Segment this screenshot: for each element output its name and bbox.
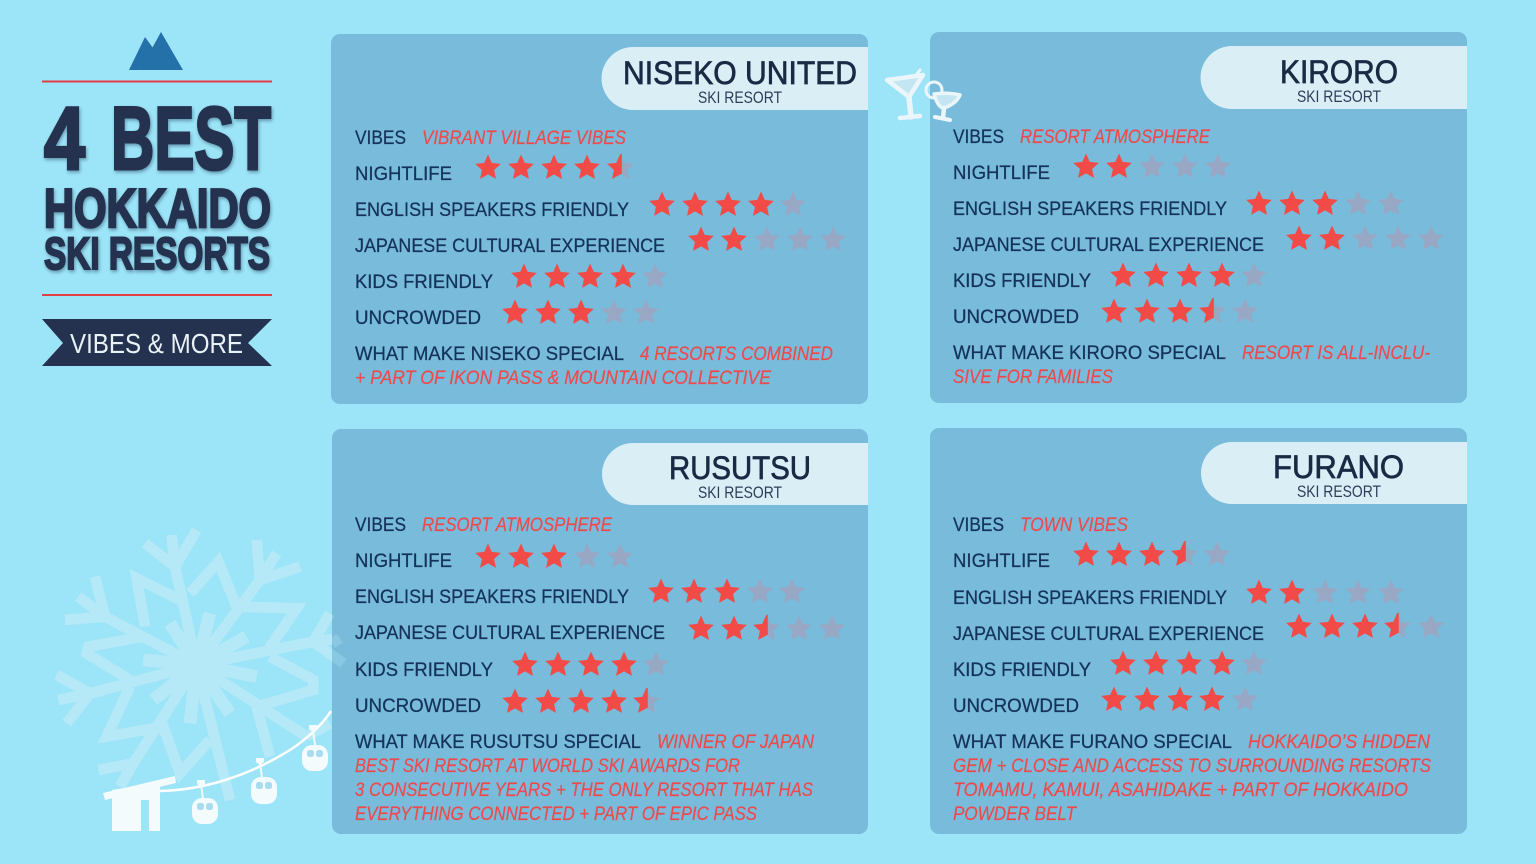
title block: HOKKAIDO: [44, 177, 271, 239]
header: Rusutsu: [602, 443, 868, 505]
rating labels and stars: JAPANESE CULTURAL EXPERIENCE: [355, 622, 665, 644]
header: Rusutsu: SKI RESORT: [698, 483, 782, 502]
what makes Furano special: WHAT MAKE FURANO SPECIAL: [953, 731, 1232, 753]
header: Kiroro: KIRORO: [1280, 54, 1398, 90]
what makes Furano special: HOKKAIDO’S HIDDEN: [1248, 731, 1431, 753]
what makes Rusutsu special: BEST SKI RESORT AT WORLD SKI AWARDS FOR: [355, 755, 740, 777]
rating labels and stars: JAPANESE CULTURAL EXPERIENCE: [355, 235, 665, 257]
rating labels and stars: [953, 514, 1444, 717]
rating labels and stars: UNCROWDED: [355, 695, 481, 717]
rating labels and stars: VIBES: [953, 514, 1004, 536]
what makes Rusutsu special: WHAT MAKE RUSUTSU SPECIAL: [355, 731, 641, 753]
icon: gondola 3: [302, 725, 328, 771]
rating labels and stars: UNCROWDED: [953, 695, 1079, 717]
what makes Rusutsu special: WINNER OF JAPAN: [657, 731, 815, 753]
header: Kiroro: [1201, 46, 1467, 109]
rating labels and stars: ENGLISH SPEAKERS FRIENDLY: [355, 199, 629, 221]
icon: gondola 1: [192, 780, 218, 824]
rating labels and stars: ENGLISH SPEAKERS FRIENDLY: [953, 587, 1227, 609]
header: Niseko United: NISEKO UNITED: [623, 55, 857, 91]
rating labels and stars: VIBES: [355, 127, 406, 149]
what makes Rusutsu special: EVERYTHING CONNECTED + PART OF EPIC PASS: [355, 803, 757, 825]
rating labels and stars: KIDS FRIENDLY: [953, 659, 1091, 681]
rating labels and stars: VIBES: [355, 514, 406, 536]
rating labels and stars: RESORT ATMOSPHERE: [422, 514, 613, 536]
header: Furano: FURANO: [1273, 449, 1404, 485]
rating labels and stars: VIBRANT VILLAGE VIBES: [422, 127, 626, 149]
what makes Kiroro special: SIVE FOR FAMILIES: [953, 366, 1113, 388]
panel: Niseko United: [331, 34, 868, 404]
header: Furano: SKI RESORT: [1297, 482, 1381, 501]
rating labels and stars: [355, 127, 846, 329]
icon: lift station: [103, 776, 176, 831]
rating labels and stars: RESORT ATMOSPHERE: [1020, 126, 1211, 148]
what makes Furano special: GEM + CLOSE AND ACCESS TO SURROUNDING RESORTS: [953, 755, 1431, 777]
rating labels and stars: JAPANESE CULTURAL EXPERIENCE: [953, 623, 1264, 645]
rating labels and stars: UNCROWDED: [953, 306, 1079, 328]
header: Kiroro: SKI RESORT: [1297, 87, 1381, 106]
icon: cocktail glasses: [887, 70, 960, 120]
what makes Niseko special: + PART OF IKON PASS & MOUNTAIN COLLECTIVE: [355, 367, 772, 389]
banner: vibes and more: [42, 319, 272, 366]
what makes Niseko special: 4 RESORTS COMBINED: [640, 343, 833, 365]
header: Furano: [1201, 442, 1467, 504]
icon: snowflake: [57, 530, 343, 800]
rating labels and stars: NIGHTLIFE: [953, 162, 1050, 184]
what makes Furano special: POWDER BELT: [953, 803, 1078, 825]
rating labels and stars: JAPANESE CULTURAL EXPERIENCE: [953, 234, 1264, 256]
header: Rusutsu: RUSUTSU: [669, 450, 811, 486]
rating labels and stars: NIGHTLIFE: [953, 550, 1050, 572]
what makes Kiroro special: WHAT MAKE KIRORO SPECIAL: [953, 342, 1226, 364]
title block: 4: [44, 88, 85, 188]
what makes Kiroro special: [953, 342, 1430, 388]
what makes Furano special: TOMAMU, KAMUI, ASAHIDAKE + PART OF HOKKAIDO: [953, 779, 1408, 801]
what makes Niseko special: WHAT MAKE NISEKO SPECIAL: [355, 343, 624, 365]
what makes Rusutsu special: 3 CONSECUTIVE YEARS + THE ONLY RESORT THAT HAS: [355, 779, 813, 801]
header: Niseko United: SKI RESORT: [698, 88, 782, 107]
icon: mountains: [129, 32, 183, 70]
what makes Kiroro special: RESORT IS ALL-INCLU-: [1242, 342, 1430, 364]
rating labels and stars: [355, 514, 845, 717]
panel: Furano: [930, 428, 1467, 834]
banner: vibes and more: VIBES & MORE: [70, 328, 243, 359]
rating labels and stars: UNCROWDED: [355, 307, 481, 329]
panel: Rusutsu: [332, 429, 868, 834]
what makes Niseko special: [355, 343, 833, 389]
what makes Rusutsu special: [355, 731, 815, 825]
rating labels and stars: KIDS FRIENDLY: [953, 270, 1091, 292]
rating labels and stars: ENGLISH SPEAKERS FRIENDLY: [953, 198, 1227, 220]
snowflake tip over panel edge: [313, 613, 343, 663]
rating labels and stars: TOWN VIBES: [1020, 514, 1128, 536]
title block: SKI RESORTS: [44, 228, 270, 279]
what makes Furano special: [953, 731, 1431, 825]
title block: [42, 80, 272, 296]
rating labels and stars: NIGHTLIFE: [355, 163, 452, 185]
icon: gondola lift: [103, 711, 331, 831]
header: Niseko United: [602, 47, 868, 110]
panel: Kiroro: [930, 32, 1467, 403]
rating labels and stars: NIGHTLIFE: [355, 550, 452, 572]
icon: gondola 2: [251, 758, 277, 804]
title block: BEST: [111, 88, 271, 188]
rating labels and stars: VIBES: [953, 126, 1004, 148]
rating labels and stars: KIDS FRIENDLY: [355, 271, 493, 293]
rating labels and stars: KIDS FRIENDLY: [355, 659, 493, 681]
rating labels and stars: [953, 126, 1444, 328]
rating labels and stars: ENGLISH SPEAKERS FRIENDLY: [355, 586, 629, 608]
